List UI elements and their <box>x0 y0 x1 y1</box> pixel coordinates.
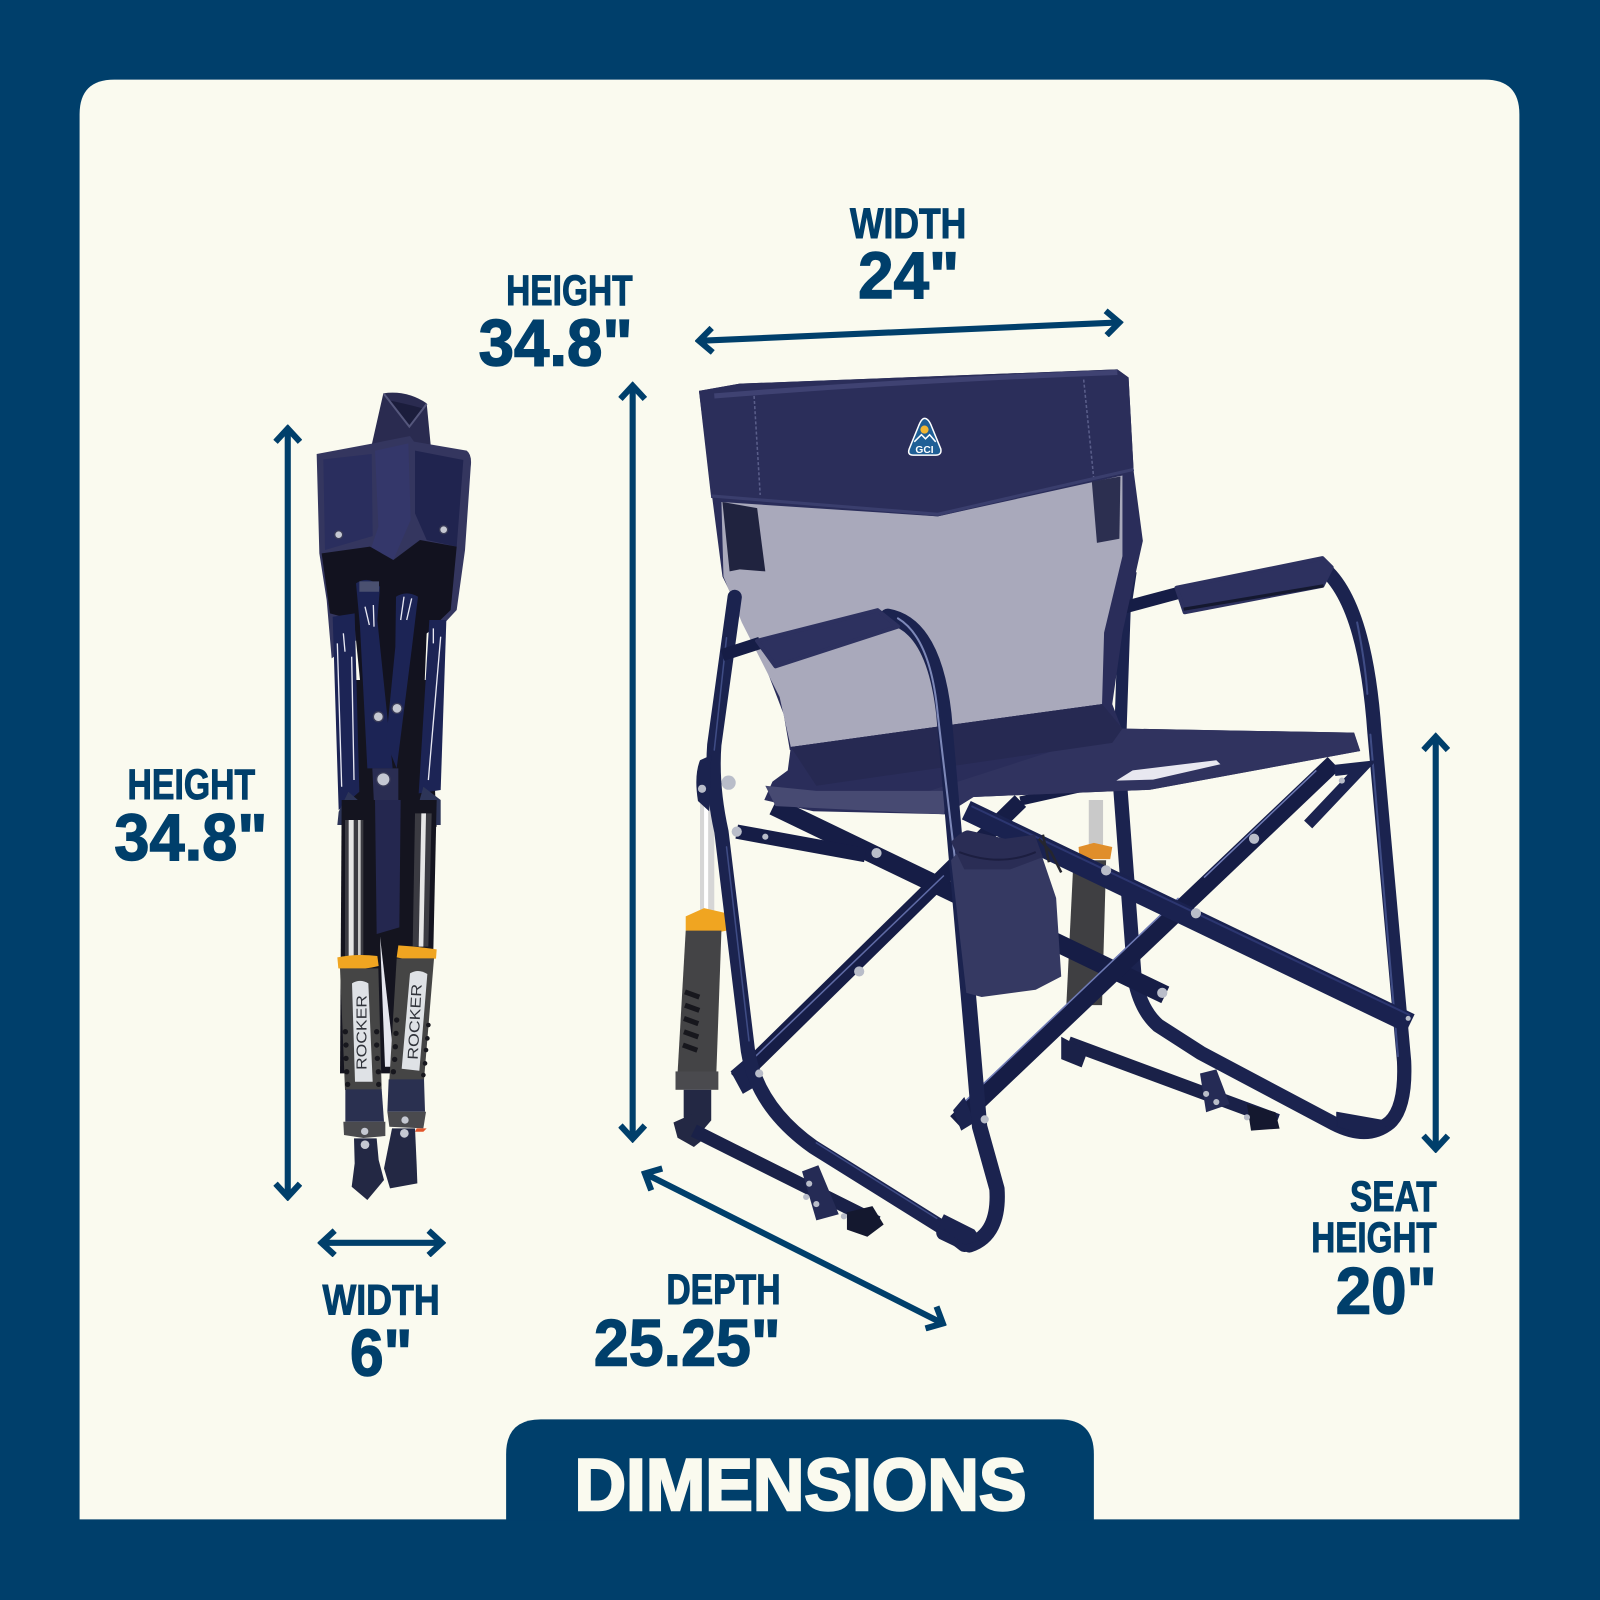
label: folded height 34.8 inches: HEIGHT <box>128 761 255 809</box>
rear armrest pad <box>1177 558 1332 612</box>
arrow: seat height <box>1433 737 1439 1149</box>
title tab: dimensions <box>506 1419 1094 1526</box>
left runner foot bar <box>694 1131 884 1237</box>
folded chair: upper fabric and frame <box>317 393 471 827</box>
rocker label left: ROCKER <box>354 995 370 1070</box>
folded chair: rockers and feet <box>337 800 437 1200</box>
rocker label right: ROCKER <box>406 983 426 1060</box>
right frame tubes <box>1119 567 1404 1135</box>
label: main width 24 inches <box>850 200 966 313</box>
backrest fabric <box>699 369 1143 750</box>
label: main height 34.8 inches: 34.8" <box>479 306 633 380</box>
backrest frame post <box>1120 571 1131 733</box>
label: depth 25.25 inches: 25.25" <box>594 1306 781 1380</box>
label: folded width 6 inches: 6" <box>350 1317 412 1391</box>
right runner foot bar <box>1061 1037 1280 1131</box>
front flat crossbar <box>966 806 1411 1023</box>
rocker label left <box>352 981 373 1082</box>
left armrest connector <box>722 643 760 655</box>
folded chair photo illustration <box>317 393 471 1200</box>
main chair photo illustration <box>673 369 1411 1245</box>
label: seat height 20 inches: 20" <box>1336 1254 1437 1328</box>
front rising crossbar <box>953 763 1362 1131</box>
label: folded height 34.8 inches <box>114 761 267 875</box>
arrow: depth <box>645 1173 943 1323</box>
label: seat height 20 inches <box>1311 1173 1437 1328</box>
GCI logo badge <box>909 418 941 456</box>
GCI logo badge: GCI <box>915 445 934 456</box>
front armrest pad <box>757 610 898 666</box>
left frame tube <box>696 597 964 1245</box>
mesh panel <box>721 476 1122 747</box>
arrow: main height <box>630 386 636 1139</box>
label: folded width 6 inches: WIDTH <box>322 1276 440 1324</box>
arrow: folded height <box>285 429 291 1197</box>
label: depth 25.25 inches: DEPTH <box>666 1266 781 1314</box>
label: main width 24 inches: 24" <box>858 239 959 313</box>
arrow: folded width <box>321 1240 442 1246</box>
rear crossbars <box>731 786 1167 1094</box>
title: DIMENSIONS <box>574 1443 1027 1526</box>
chrome rods <box>345 813 432 957</box>
label: main height 34.8 inches: HEIGHT <box>506 267 633 315</box>
label: main width 24 inches: WIDTH <box>850 200 966 248</box>
arrow: main width <box>699 322 1119 341</box>
left shock cylinder <box>673 803 727 1147</box>
label: main height 34.8 inches <box>479 267 633 380</box>
seat logo <box>1116 760 1220 781</box>
seat fabric <box>764 704 1360 814</box>
label: depth 25.25 inches <box>594 1266 781 1380</box>
rear armrest connector <box>1121 593 1179 608</box>
front upright and armrest tube <box>888 616 997 1245</box>
label: seat height 20 inches: SEAT <box>1350 1173 1437 1221</box>
right rear shock cylinder <box>1066 800 1112 1005</box>
top band <box>699 369 1134 516</box>
rocker label right <box>402 971 427 1071</box>
label: folded height 34.8 inches: 34.8" <box>114 801 267 875</box>
label: folded width 6 inches <box>322 1276 440 1391</box>
cup holder pouch <box>951 830 1061 997</box>
label: seat height 20 inches: HEIGHT <box>1311 1214 1437 1262</box>
